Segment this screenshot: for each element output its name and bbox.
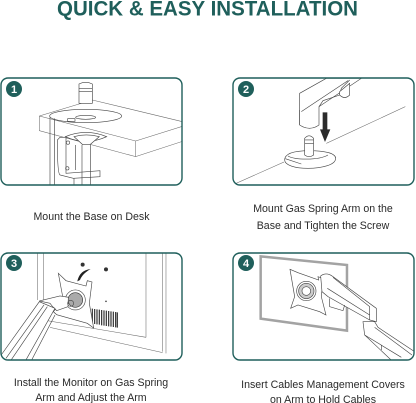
badge 1: 1 — [11, 84, 17, 96]
illustration: arm with mount plate — [261, 256, 415, 363]
illustration: arm onto base — [235, 78, 405, 184]
caption 1: Mount the Base on Desk — [33, 211, 150, 223]
badge 4 — [238, 255, 254, 271]
badge 2: 2 — [243, 84, 249, 96]
illustration: desk clamp base — [39, 82, 187, 187]
badge 3: 3 — [11, 258, 17, 270]
badge 2 — [238, 81, 254, 97]
caption 2: Base and Tighten the Screw — [257, 220, 390, 232]
caption 2: Mount Gas Spring Arm on the — [253, 203, 393, 215]
badge 3 — [6, 255, 22, 271]
illustration: monitor and arm — [0, 252, 166, 362]
panel: step 1 — [1, 78, 187, 187]
badge 4: 4 — [243, 258, 250, 270]
frame — [1, 78, 182, 185]
frame — [233, 78, 414, 185]
caption 4: Insert Cables Management Covers — [241, 379, 405, 391]
caption 3: Install the Monitor on Gas Spring — [14, 377, 168, 389]
badge 1 — [6, 81, 22, 97]
frame — [1, 253, 182, 360]
panel: step 3 — [0, 252, 182, 362]
frame — [233, 253, 414, 360]
panel: step 2 — [233, 78, 414, 185]
panel: step 4 — [233, 253, 415, 363]
